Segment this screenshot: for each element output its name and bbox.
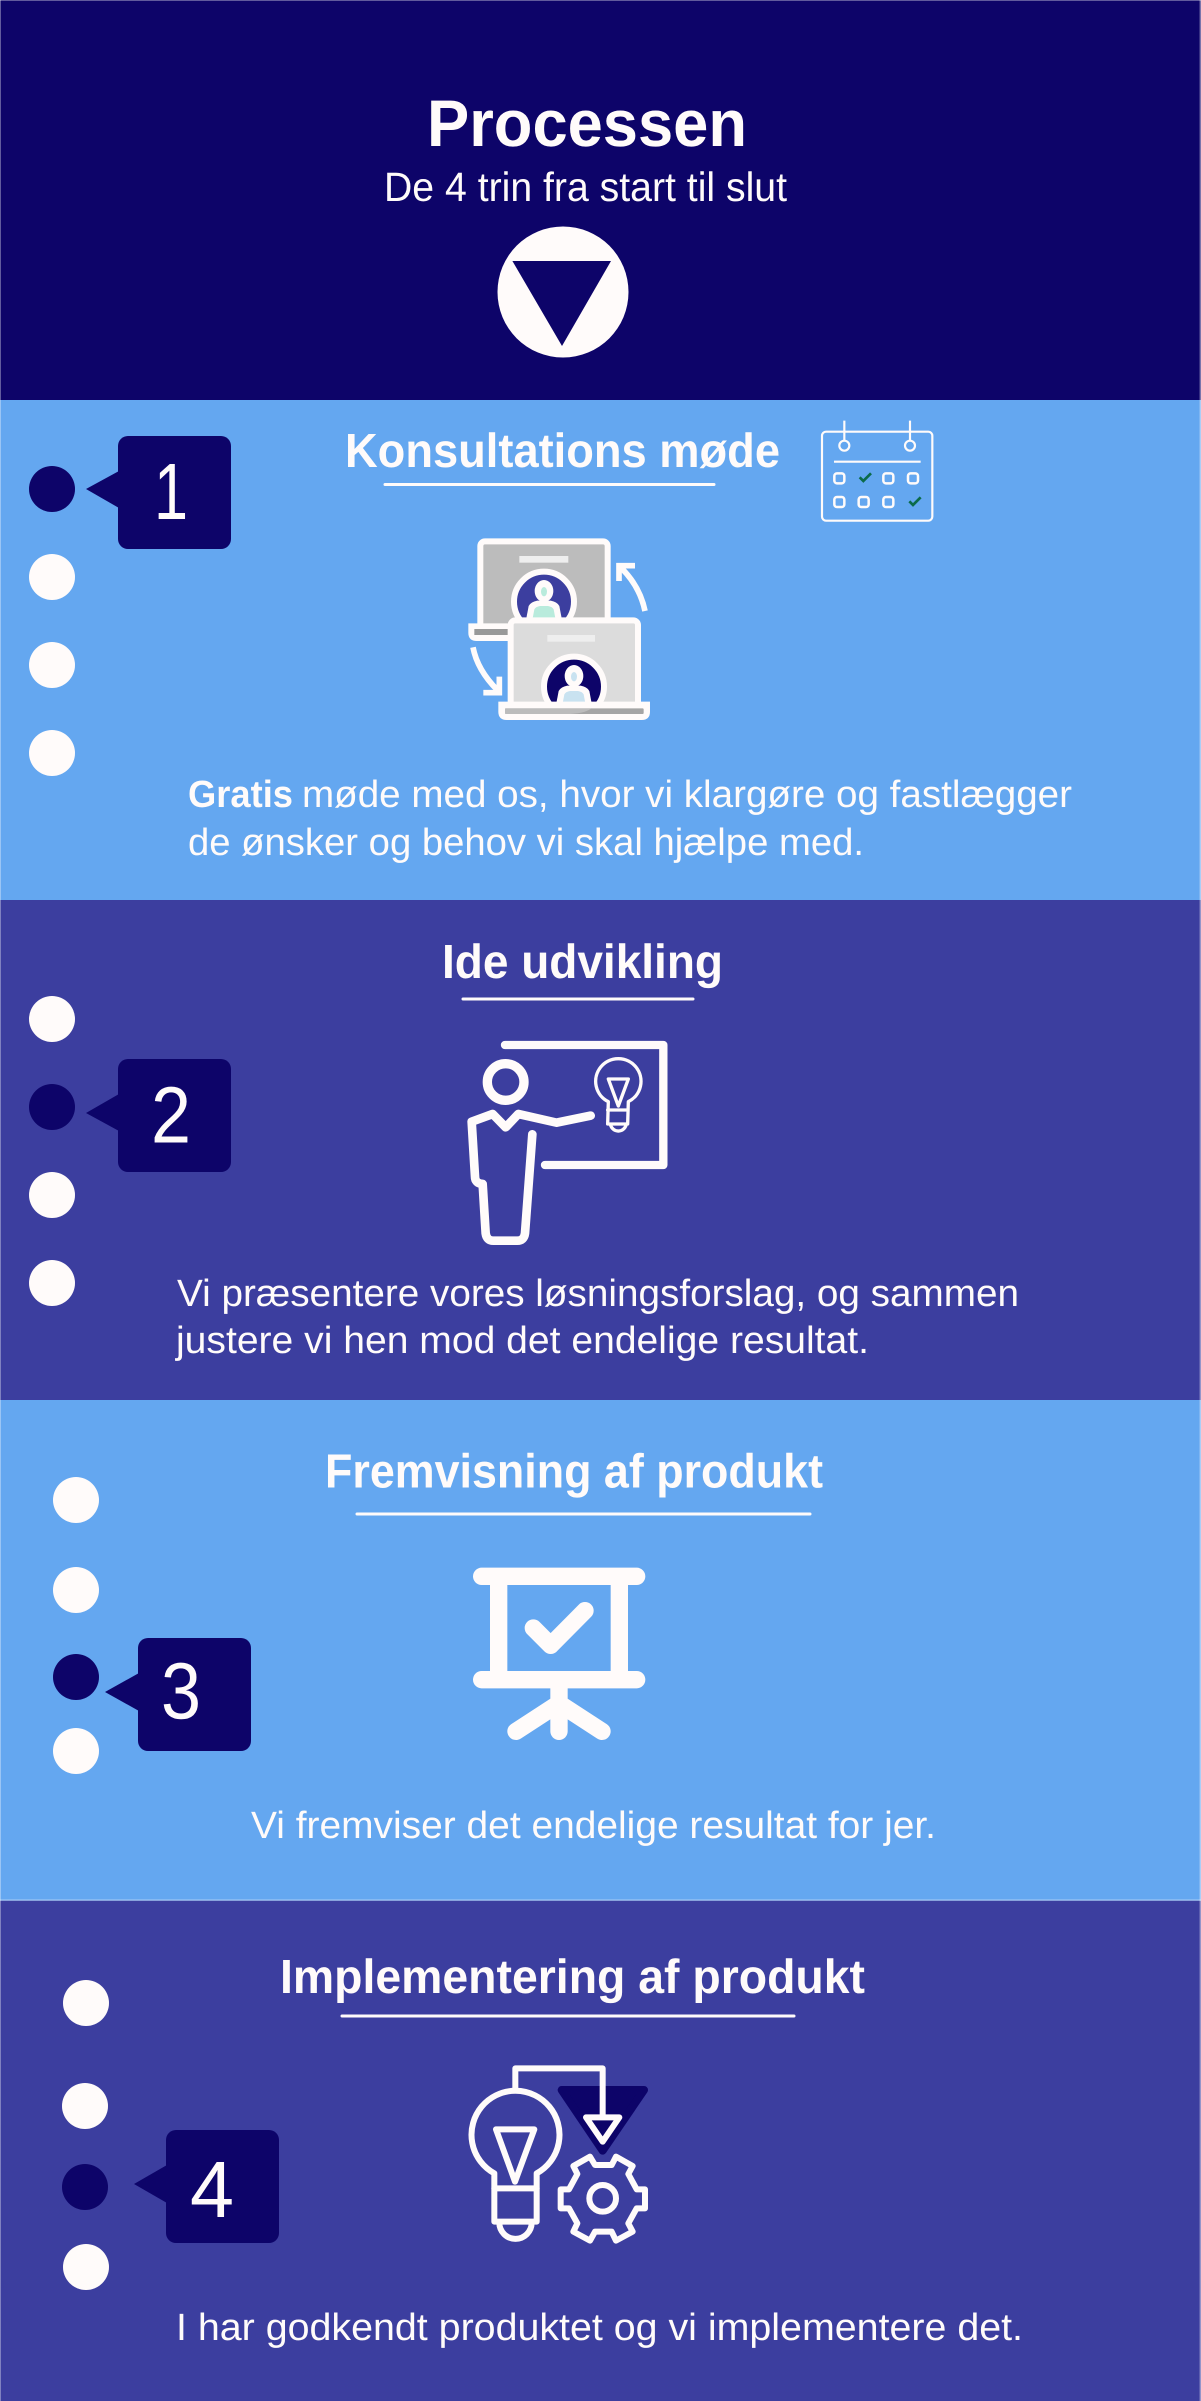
text block: step 2: justere vi hen mod det endelige resultat.: [175, 1320, 869, 1362]
panel: header: [0, 0, 1201, 400]
icon: presenter at board with light bulb: [472, 1045, 663, 1241]
number badge 1: [86, 436, 231, 549]
subtitle: De 4 trin fra start til slut: [384, 164, 788, 210]
number badge 4: [134, 2130, 279, 2243]
panel: step 1: [0, 400, 1201, 900]
progress dots: step 3: [53, 1477, 99, 1774]
heading: step 2: Ide udvikling: [442, 936, 723, 989]
heading: step 1: Konsultations møde: [345, 425, 780, 478]
title: Processen: [427, 86, 747, 160]
text block: step 4: I har godkendt produktet og vi implementere det.: [176, 2307, 1023, 2349]
number badge 2: 2: [151, 1070, 191, 1160]
panel: step 3: [0, 1400, 1201, 1900]
heading: step 4: Implementering af produkt: [280, 1951, 865, 2004]
icon: light bulb to gear: [471, 2068, 645, 2241]
progress dots: step 1: [29, 466, 75, 776]
heading: step 3: Fremvisning af produkt: [325, 1446, 823, 1498]
icon: presentation board with check: [482, 1576, 637, 1731]
number badge 1: 1: [154, 447, 188, 536]
text block: step 3: Vi fremviser det endelige resultat for jer.: [251, 1805, 936, 1847]
panel: step 4: [0, 1900, 1201, 2401]
progress dots: step 4: [62, 1980, 109, 2290]
progress dots: step 2: [29, 996, 75, 1306]
icon: two laptops video meeting: [468, 541, 650, 720]
text block: step 1: [188, 774, 1072, 864]
panel: step 2: [0, 900, 1201, 1400]
number badge 4: 4: [190, 2145, 234, 2234]
text block: step 2: Vi præsentere vores løsningsforslag, og sammen: [177, 1273, 1019, 1315]
icon: calendar: [822, 421, 932, 521]
text block: step 1: møde med os, hvor vi klargøre og fastlægger: [302, 774, 1072, 816]
number badge 2: [86, 1059, 231, 1172]
text block: step 1: Gratis: [188, 774, 293, 816]
text block: step 2: [175, 1273, 1019, 1362]
text block: step 1: de ønsker og behov vi skal hjælpe med.: [188, 822, 864, 864]
icon: down triangle in circle: [498, 226, 628, 358]
number badge 3: [105, 1638, 251, 1751]
number badge 3: 3: [161, 1646, 201, 1736]
